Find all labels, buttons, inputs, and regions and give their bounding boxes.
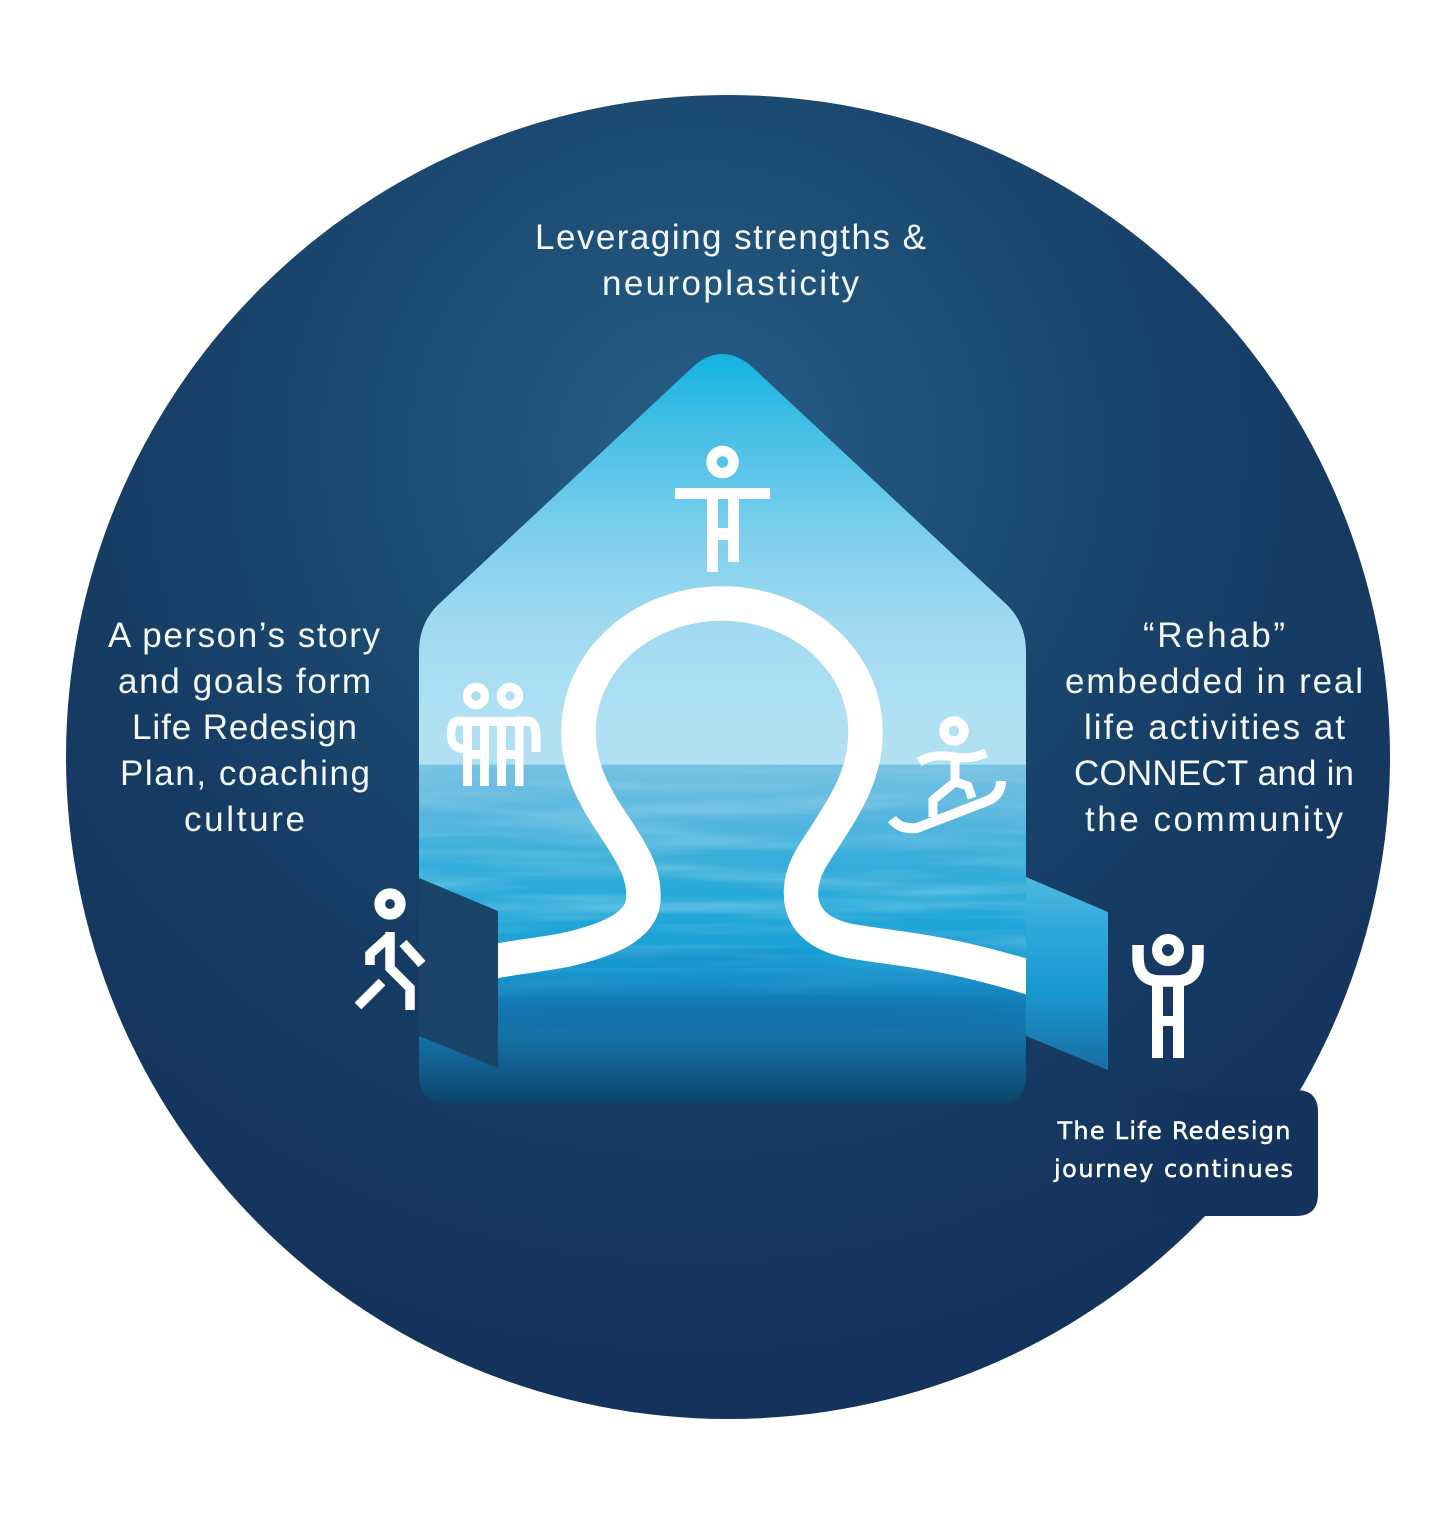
text block: a person's story: and goals form xyxy=(118,662,371,701)
background circle xyxy=(66,95,1390,1419)
text block: rehab embedded in real life xyxy=(1065,616,1363,839)
text block: a person's story: Life Redesign xyxy=(132,708,357,747)
callout text: journey continues xyxy=(1053,1117,1293,1183)
icon: snowboarder xyxy=(892,721,1001,828)
heading: leveraging strengths: Leveraging strengths & xyxy=(535,218,926,257)
text block: a person's story: Plan, coaching xyxy=(120,754,370,793)
panel: house with sky and sea xyxy=(419,345,1035,1105)
text block: a person's story: culture xyxy=(184,800,305,839)
right doorway xyxy=(1026,877,1108,1070)
heading: leveraging strengths: neuroplasticity xyxy=(602,264,860,303)
omega path xyxy=(470,604,1035,979)
icon: person with arms raised xyxy=(1138,939,1198,1058)
callout text: journey continues: The Life Redesign xyxy=(1056,1117,1290,1145)
text block: a person's story: A person’s story xyxy=(108,616,380,655)
infographic: Life Redesign journey xyxy=(66,95,1390,1419)
icon: person with arms out xyxy=(675,451,770,572)
text block: rehab embedded in real life: life activities at xyxy=(1084,708,1345,747)
text block: rehab embedded in real life: the community xyxy=(1085,800,1344,839)
text block: a person's story xyxy=(108,616,380,839)
callout text: journey continues: journey continues xyxy=(1053,1155,1293,1183)
text block: rehab embedded in real life: embedded in real xyxy=(1065,662,1363,701)
callout tab xyxy=(1110,1090,1318,1216)
heading: leveraging strengths xyxy=(535,218,926,303)
text block: rehab embedded in real life: “Rehab” xyxy=(1143,616,1285,655)
icon: two people together xyxy=(451,687,536,786)
left doorway xyxy=(419,878,498,1068)
icon: walking person xyxy=(358,894,422,1010)
text block: rehab embedded in real life: CONNECT and in xyxy=(1074,754,1354,793)
